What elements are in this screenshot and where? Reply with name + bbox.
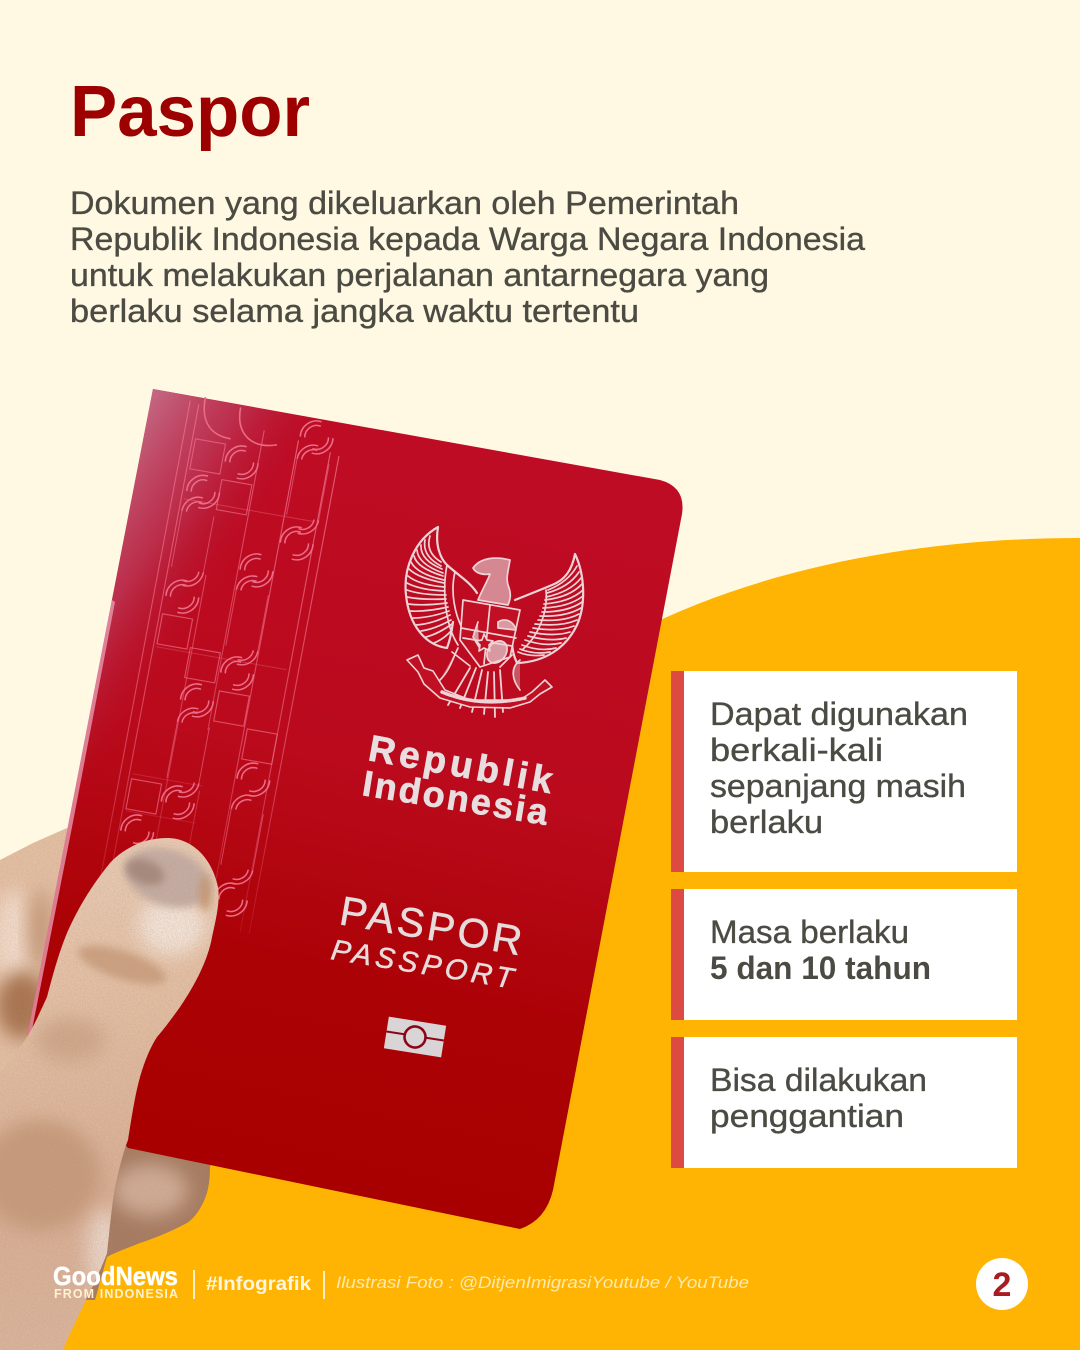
knuckle crease: [76, 942, 168, 987]
shield: [460, 600, 520, 667]
card 2: [671, 889, 1017, 1020]
footer divider: [193, 1270, 195, 1299]
intro text block: [70, 185, 865, 329]
title: Paspor: [70, 72, 310, 152]
garuda emblem: [406, 527, 583, 717]
cover text: Paspor Passport: PASSPORT: [329, 934, 518, 996]
intro text block: berlaku selama jangka waktu tertentu: [70, 293, 639, 329]
legs: [440, 648, 520, 690]
card 3: [671, 1037, 1017, 1168]
cover text: Republik Indonesia: [360, 728, 556, 833]
card 3: penggantian: [710, 1098, 904, 1134]
cover text: Republik Indonesia: Republik: [366, 728, 556, 801]
card 3: Bisa dilakukan: [710, 1062, 927, 1098]
tail: [448, 668, 503, 717]
embossed pattern: [95, 395, 345, 934]
passport spine shading: [69, 389, 345, 820]
card 2: 5 dan 10 tahun: [710, 950, 931, 986]
head and neck: [473, 558, 510, 605]
page number badge: 2: [993, 1266, 1011, 1304]
hand: fingers behind passport: [0, 828, 68, 1073]
passport cover: [27, 389, 683, 1229]
intro text block: Republik Indonesia kepada Warga Negara Indonesia: [70, 221, 865, 257]
cover text: Paspor Passport: [329, 888, 526, 996]
logo: GoodNews from Indonesia: GoodNews: [53, 1261, 178, 1291]
left wing: [406, 527, 477, 648]
card 1: berkali-kali: [710, 732, 883, 768]
hand: thumb: [0, 830, 230, 1350]
biometric chip icon: [384, 1017, 446, 1057]
yellow curved panel: [60, 538, 1080, 1350]
card 2: Masa berlaku: [710, 914, 909, 950]
hand: lower palm: [86, 1146, 210, 1300]
base shadow: [0, 1120, 100, 1230]
hashtag: #Infografik: [206, 1274, 311, 1295]
intro text block: untuk melakukan perjalanan antarnegara yang: [70, 257, 769, 293]
thumb light patch: [138, 895, 206, 955]
logo: GoodNews from Indonesia: FROM INDONESIA: [54, 1287, 178, 1301]
card 1: sepanjang masih: [710, 768, 966, 804]
footer divider: [323, 1271, 325, 1299]
ribbon: [407, 655, 552, 708]
page number badge: [976, 1258, 1028, 1310]
thumbnail: [124, 846, 212, 912]
card 1: berlaku: [710, 804, 823, 840]
card 1: [671, 671, 1017, 872]
cover text: Republik Indonesia: Indonesia: [360, 762, 552, 833]
intro text block: Dokumen yang dikeluarkan oleh Pemerintah: [70, 185, 739, 221]
photo credit: Ilustrasi Foto : @DitjenImigrasiYoutube / YouTube: [336, 1273, 749, 1292]
card 1: Dapat digunakan: [710, 696, 968, 732]
right wing: [512, 554, 583, 663]
cover text: Paspor Passport: PASPOR: [336, 888, 526, 964]
passport: [27, 389, 683, 1229]
passport left edge highlight: [27, 600, 115, 1037]
